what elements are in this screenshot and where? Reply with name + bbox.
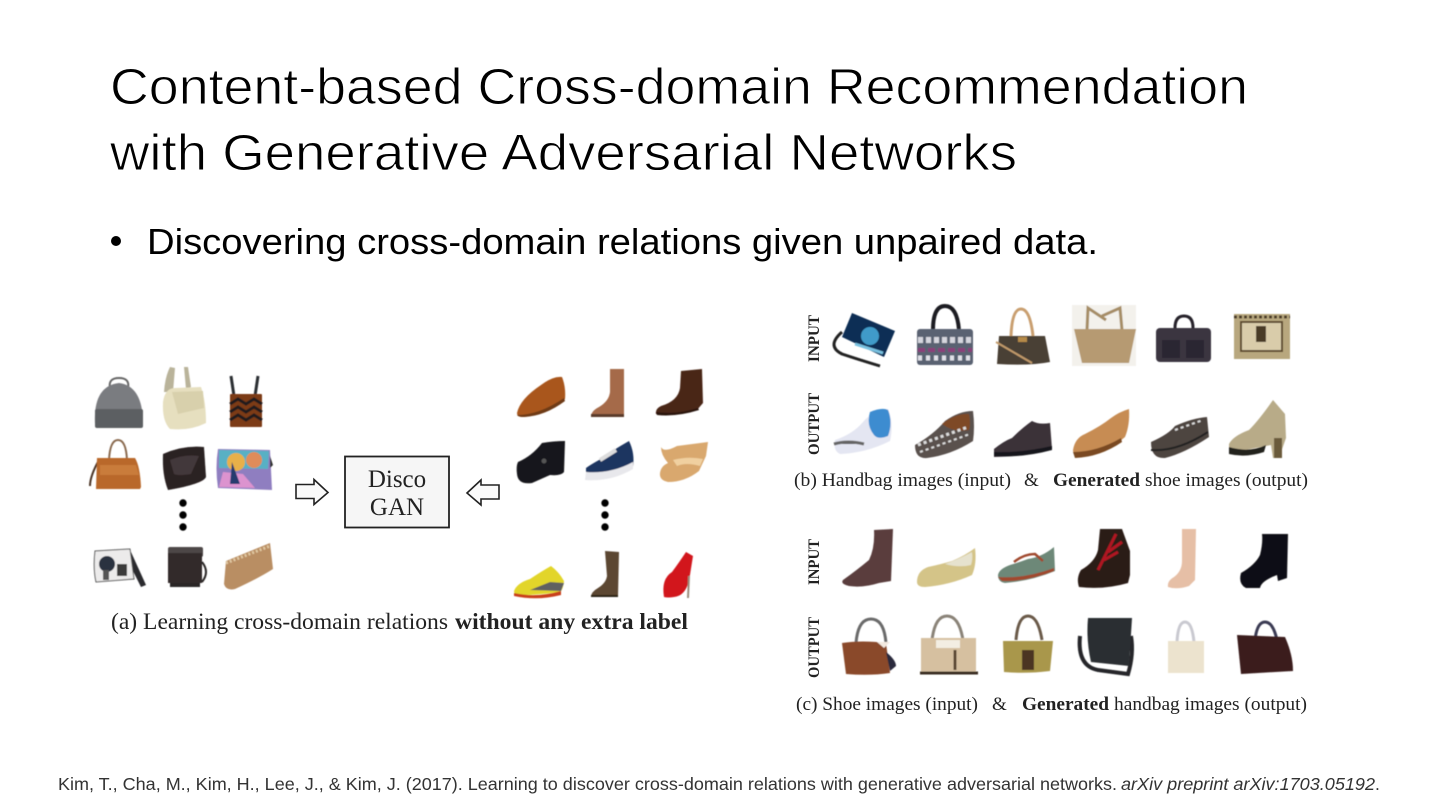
caption (c) [796, 694, 1307, 715]
arrow: left [467, 480, 499, 505]
icon: dark leather bag [163, 447, 206, 490]
icon: black chelsea boot [1240, 534, 1288, 588]
citation footer: arXiv preprint arXiv:1703.05192 [1121, 774, 1375, 794]
icon: ornate bag [1234, 314, 1290, 359]
output shoes [834, 400, 1286, 458]
caption (b): (b) Handbag images (input) [794, 470, 1011, 491]
icon: zebra loafer [915, 411, 974, 458]
title: Content-based Cross-domain Recommendation [110, 58, 1248, 115]
caption (c): Generated [1022, 694, 1109, 715]
caption (a) [111, 609, 688, 634]
Disco GAN box: GAN [370, 494, 424, 521]
icon: tan clutch [224, 543, 273, 589]
icon: black shoulder bag [1080, 618, 1132, 674]
title: with Generative Adversarial Networks [109, 124, 1017, 181]
icon: floral handbag [917, 306, 973, 365]
icon: blue messenger [834, 313, 895, 366]
icon: hiking boot [1078, 529, 1130, 588]
icon: tall tan boot [591, 369, 624, 417]
icon: beige backpack [163, 367, 206, 429]
caption (a): (a) Learning cross-domain relations [111, 609, 448, 634]
citation footer: . [1375, 774, 1380, 794]
icon: brown oxford [517, 377, 565, 417]
Disco GAN box: Disco [368, 466, 426, 493]
icon: dark brown bootie [656, 369, 703, 415]
caption (c): handbag images (output) [1114, 694, 1307, 715]
icon: pink ugg boot [1168, 529, 1196, 588]
icon: beige heeled shoe [1229, 400, 1286, 458]
axis label: OUTPUT: OUTPUT [806, 617, 823, 678]
title [109, 58, 1248, 181]
icon: tan loafer [1073, 409, 1129, 458]
icon: red stiletto [663, 552, 693, 598]
input shoes [842, 529, 1288, 588]
icon: cream flat [917, 548, 976, 587]
icon: colourful messenger bag [216, 449, 273, 490]
icon: dark briefcase [1156, 316, 1211, 362]
axis label: INPUT: INPUT [806, 315, 823, 362]
bullet point: Discovering cross-domain relations given unpaired data. [147, 221, 1098, 262]
icon: wedge sandal [660, 442, 708, 482]
Disco GAN box [345, 456, 449, 528]
icon: white messenger bag [94, 549, 146, 587]
caption (b): Generated [1053, 470, 1140, 491]
arrow: right [296, 480, 328, 504]
caption (b) [794, 470, 1308, 491]
caption (a): without any extra label [455, 609, 688, 634]
icon: brown monogram bag [996, 309, 1050, 365]
citation footer: Kim, T., Cha, M., Kim, H., Lee, J., & Kim, J. (2017). Learning to discover cross-domain relations with generative adversarial networks. [58, 774, 1117, 794]
icon: olive tote [1003, 616, 1053, 673]
output handbags [842, 616, 1293, 675]
caption (c): & [992, 694, 1007, 715]
shoe image set [514, 369, 708, 598]
dots [601, 499, 609, 531]
caption (b): shoe images (output) [1145, 470, 1308, 491]
icon: woven tote [1072, 305, 1136, 366]
icon: dark loafer [994, 421, 1052, 457]
axis label: INPUT: INPUT [806, 539, 823, 585]
icon: navy sneaker [585, 441, 634, 480]
icon: dark maroon bag [1237, 622, 1293, 674]
axis label: OUTPUT: OUTPUT [806, 393, 823, 455]
icon: mary jane [998, 547, 1055, 583]
input handbags [834, 305, 1290, 366]
panel: (c) shoe to generated handbag [796, 529, 1307, 715]
icon: black clog [517, 441, 565, 483]
icon: gray backpack [95, 378, 143, 428]
icon: gray boat shoe [1151, 417, 1209, 458]
icon: cream tote [1168, 622, 1204, 673]
icon: brown red bag [842, 619, 896, 675]
icon: cream striped bag [920, 616, 978, 673]
caption (b): & [1024, 470, 1039, 491]
icon: dark shoulder bag [168, 547, 206, 587]
icon: cowboy boot [591, 551, 619, 597]
handbag image set [90, 367, 273, 589]
icon: brown ankle boot [842, 529, 893, 587]
icon: orange tote [90, 440, 141, 489]
panel: (a) learning cross-domain relations [90, 367, 708, 634]
dots [179, 499, 187, 531]
panel: (b) handbag to generated shoe [794, 305, 1308, 491]
icon: blue white sneaker [834, 409, 892, 454]
icon: zigzag crossbody bag [230, 376, 262, 427]
caption (c): (c) Shoe images (input) [796, 694, 978, 715]
icon: yellow sneaker [514, 566, 564, 598]
